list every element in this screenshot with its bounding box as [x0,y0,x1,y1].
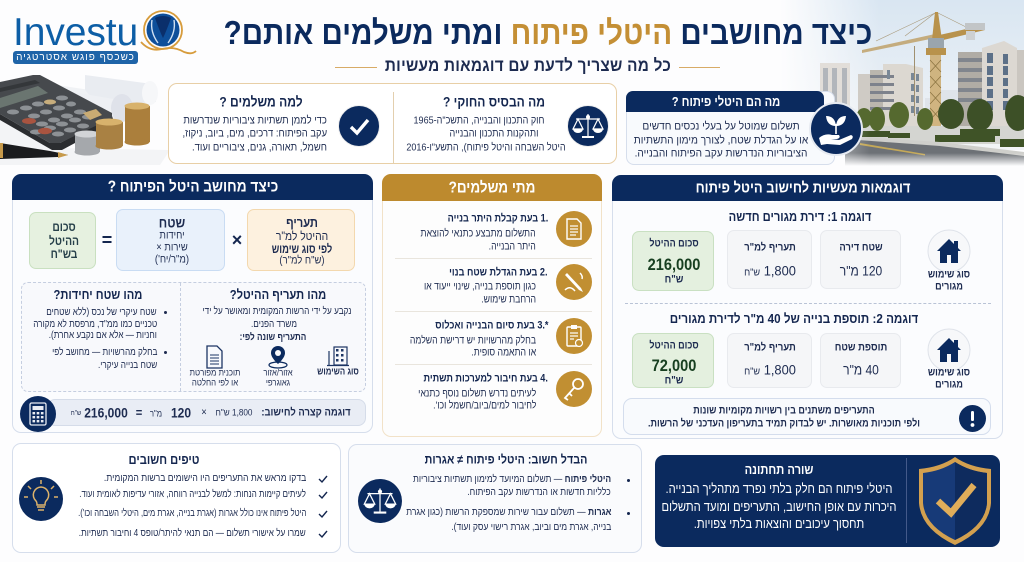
text: unit area definition: וחניות — אלא אם נקבע אחרת). [49,330,157,341]
icon: clipboard [556,318,592,354]
text: definitions: בנייה, אגרת מים וביוב, אגרת רישוי עסק ועוד). [451,522,611,533]
text: why pay: חשמל, תאורה, גנים, ציבוריים ועוד. [192,141,327,153]
text: rate definition: נקבע על ידי הרשות המקומית ומאושר על ידי [203,306,351,317]
panel: why pay and legal basis [168,83,617,164]
label: detailed plan: או לפי החלטה [192,377,238,388]
panel: how the levy is calculated [12,174,373,433]
text: legal basis: חוק התכנון והבנייה, התשכ"ה-1965 [414,115,544,127]
tile: levy total: ש"ח [665,273,683,285]
text: definitions [409,471,639,535]
step 4 [418,371,592,412]
heading: מה הם היטלי פיתוח ? [672,94,780,109]
formula: rate: (ש"ח למ"ר) [279,254,325,266]
tile: levy total: ש"ח [665,374,683,386]
panel: levies vs fees [348,444,642,553]
text: rate definition: התעריף שונה לפי: [240,332,306,343]
icon: scales of justice [567,105,609,147]
short calculation example [47,399,366,426]
formula: area [116,209,225,271]
title: כיצד מחושבים היטלי פיתוח ומתי משלמים אותם? [224,14,872,51]
icon: hand with plant [809,102,863,156]
text: definitions: היטלי פיתוח — תשלום המיועד למימון תשתיות ציבוריות [413,474,611,485]
tile: apartment area [820,230,901,289]
panel: when to pay [382,174,602,437]
icon: house [928,230,970,272]
icon: drafting tools [556,264,592,300]
step title: 1. בעת קבלת היתר בנייה [447,212,548,224]
step text: היתר הבנייה. [489,241,536,253]
step text [424,281,536,306]
short calculation example: ש"ח [71,410,81,417]
short calculation example: 120 [171,405,191,421]
panel: what are development levies [626,91,835,165]
example 2 title: דוגמה 2: תוספת בנייה של 40 מ"ר לדירת מגורים [670,311,918,326]
icon: check mark [338,105,380,147]
text: unit area definition: בחלק מהרשויות — מחושב לפי [52,347,157,358]
icon: document [206,345,223,369]
tile: rate per sqm [727,333,812,388]
building: middle block [858,74,872,126]
panel: bottom line [655,455,1000,547]
short calculation example: 216,000 [84,405,128,421]
icon: shield with check [917,455,993,547]
illustration: construction site with crane and buildings [802,0,1024,166]
tile: levy total [632,333,714,388]
step text: התשלום מתבצע כתנאי להוצאת [421,228,536,240]
formula: area: (מ"ר/יח') [155,253,189,265]
tips list: לעיתים קיימות הנחות: למשל לבנייה רווחה, אזורי עדיפות לאומית ועוד. [79,489,306,500]
label: usage type: סוג שימוש [928,269,970,281]
step text: לעיתים נדרש תשלום נוסף כתנאי [418,388,536,400]
label: detailed plan [190,367,240,388]
icon: building [327,346,349,366]
step text [420,228,536,253]
tips list: היטל פיתוח אינו כולל אגרות (אגרת בנייה, אגרת מים, היטלי השבחה וכו'). [78,508,306,519]
heading: שורה תחתונה [745,462,813,477]
label: usage type: סוג השימוש [317,366,359,377]
logo tagline: כשכסף פוגש אסטרטגיה [16,52,135,63]
tile: rate per sqm: 1,800 ש"ח [744,362,796,378]
tile: rate per sqm [727,230,812,289]
formula: total: בש"ח [51,247,77,261]
icon: house [928,328,970,372]
step title: 2. בעת הגדלת שטח בנוי [450,266,548,278]
step text: או התאמה סופית. [471,347,536,359]
tile: apartment area: 120 מ"ר [840,263,882,279]
text: היכרות עם אופן החישוב, התעריפים ומועד התשלום [662,499,896,514]
text: תשלום שמוטל על בעלי נכסים חדשים [642,120,800,132]
panel: definitions [21,282,366,392]
icons: check marks [316,470,330,542]
label: geographic area [263,367,293,388]
heading: הבדל חשוב: היטלי פיתוח ≠ אגרות [425,452,587,466]
heading: why pay: למה משלמים ? [219,94,303,110]
tile: added area [820,333,901,388]
panel: practical examples [612,175,1003,439]
text: why pay [182,114,327,153]
heading: כיצד מחושב היטל הפיתוח ? [108,179,278,196]
step 3 [410,318,592,359]
text: legal basis: היטל השבחה והיטל פיתוח), התשע"ו-2016 [406,142,566,154]
example 1 title: דוגמה 1: דירת מגורים חדשה [729,209,871,224]
tile: rate per sqm: תעריף למ"ר [744,341,796,353]
crane [876,13,966,41]
step text [418,388,536,412]
step title: 3.* בעת סיום הבנייה ואכלוס [435,319,548,331]
tips list: שמרו על אישורי תשלום — הם תנאי להיתר/טופס 4 וחיבור תשתיות. [79,528,306,539]
label: geographic area: אזור/אזור [263,367,293,378]
formula: rate: תעריף [286,215,318,230]
text: unit area definition: שטח בנייה עיקרי. [98,360,157,371]
text: definitions: כלליות חדשות או הנדרשות עקב הפיתוח. [468,487,611,498]
tile: levy total: סכום ההיטל [649,340,699,352]
formula: area: יחידות [159,229,185,241]
operator: equals: = [102,230,112,250]
text: או על הגדלת שטח, לצורך מימון התשתיות [634,134,808,146]
heading [612,175,1003,201]
text: הציבוריות הנדרשות עקב הפיתוח והבנייה. [635,147,807,159]
tile: levy total: 72,000 [652,356,696,375]
tile: rate per sqm: 1,800 ש"ח [744,262,796,278]
label: detailed plan: תוכנית מפורטת [190,367,240,378]
icon: calculator [20,396,56,432]
tile: levy total: סכום ההיטל [649,238,699,250]
text [634,120,808,159]
tile: apartment area: שטח דירה [839,241,883,253]
text: unit area definition: טכניים כמו ממ"ד, מרפסת לא מקורה [33,319,157,330]
formula: area: שטח [159,215,185,231]
short calculation example: דוגמה קצרה לחישוב: [261,406,351,418]
short calculation example: × [201,406,207,418]
formula: area: שירות × [156,241,188,253]
formula: total [29,212,96,269]
icon: map pin [268,346,288,369]
label: usage type: סוג שימוש [928,367,970,379]
illustration: calculator, coins and plans [0,75,168,165]
step 1 [420,211,592,253]
logo wordmark: Investu [13,11,138,54]
tips list [61,470,339,544]
tips list: בדקו מראש את התעריפים היו הישומים ברשות המקומית. [104,473,306,484]
text: legal basis: ותהקנות התכנון והבנייה [450,128,538,140]
step text [410,334,536,359]
subtitle: כל מה שצריך לדעת עם דוגמאות מעשיות [385,56,671,75]
step title: 4. בעת חיבור למערכות תשתית [424,372,548,384]
text: legal basis [406,115,566,154]
heading: טיפים חשובים [128,452,200,467]
short calculation example: 1,800 ש"ח [216,407,252,418]
step text: בחלק מהרשויות יש דרישת השלמה [410,335,536,347]
ground and trees [840,126,1024,144]
panel: important tips [12,443,341,553]
tile: levy total [632,231,714,291]
note: rates vary: ולפי תוכניות מאושרות. יש לבדוק תמיד בתעריפון העדכני של הרשות. [648,418,920,430]
heading: what is unit area: מהו שטח יחידות? [54,287,142,302]
far towers [940,90,958,125]
formula: rate [247,209,355,271]
label: usage type [928,367,970,391]
building: right block [958,52,984,128]
formula: total: ההיטל [49,234,79,248]
text: why pay: עקב הפיתוח: דרכים, מים, ביוב, ניקוז, [182,127,327,139]
step text: הרחבת שימוש. [481,294,536,306]
note: rates vary: התעריפים משתנים בין רשויות מקומיות שונות [693,405,875,417]
tile: rate per sqm: תעריף למ"ר [744,241,796,253]
label: usage type: מגורים [935,379,963,391]
text: היטלי פיתוח הם חלק בלתי נפרד מתהליך הבנייה. [666,481,892,496]
formula: total: סכום [52,220,76,234]
step text: כגון תוספת בנייה, שינוי ייעוד או [424,281,536,293]
text: rate definition [203,306,351,343]
icon: scales of justice [358,479,402,523]
heading: דוגמאות מעשיות לחישוב היטל פיתוח [696,180,910,196]
tile: added area: תוספת שטח [835,341,887,353]
short calculation example: מ"ר [150,409,162,419]
step text: לחיבור למים/ביוב/חשמל וכו'. [433,400,536,412]
icon: light bulb [19,476,63,522]
tile: added area: 40 מ"ר [843,362,879,378]
formula: rate: ההיטל למ"ר [276,229,328,243]
formula: rate: לפי סוג שימוש [272,242,332,256]
text: why pay: כדי לממן תשתיות ציבוריות שנדרשות [183,114,327,126]
text: definitions: אגרות — תשלום עבור שירות שמספקת הרשות (כגון אגרת [406,507,611,518]
heading [12,174,373,200]
tile: levy total: 216,000 [648,255,700,274]
text: unit area definition: שטח עיקרי של נכס (ללא שטחים [47,307,157,318]
operator: times: × [232,230,242,250]
heading: legal basis: מה הבסיס החוקי ? [443,94,545,110]
label: usage type [928,269,970,293]
heading [382,174,602,201]
note: rates vary [623,398,991,435]
heading: מתי משלמים? [449,180,535,197]
label: geographic area: גאוגרפי [266,377,290,388]
icon: exclamation [959,405,986,432]
logo emblem [140,10,197,54]
label: usage type: מגורים [935,281,963,293]
step 2 [424,264,592,306]
heading: what is the rate: מהו תעריף ההיטל? [230,287,326,302]
text: תחסוך עיכובים והוצאות בלתי צפויות. [694,516,864,531]
text: rate definition: משרד הפנים. [251,319,297,330]
logo: Investu [13,10,197,64]
short calculation example: = [136,405,142,420]
icon: key [556,371,592,407]
heading [626,91,824,112]
text: unit area definition [33,306,167,371]
text [661,479,897,535]
icon: document [556,211,592,247]
